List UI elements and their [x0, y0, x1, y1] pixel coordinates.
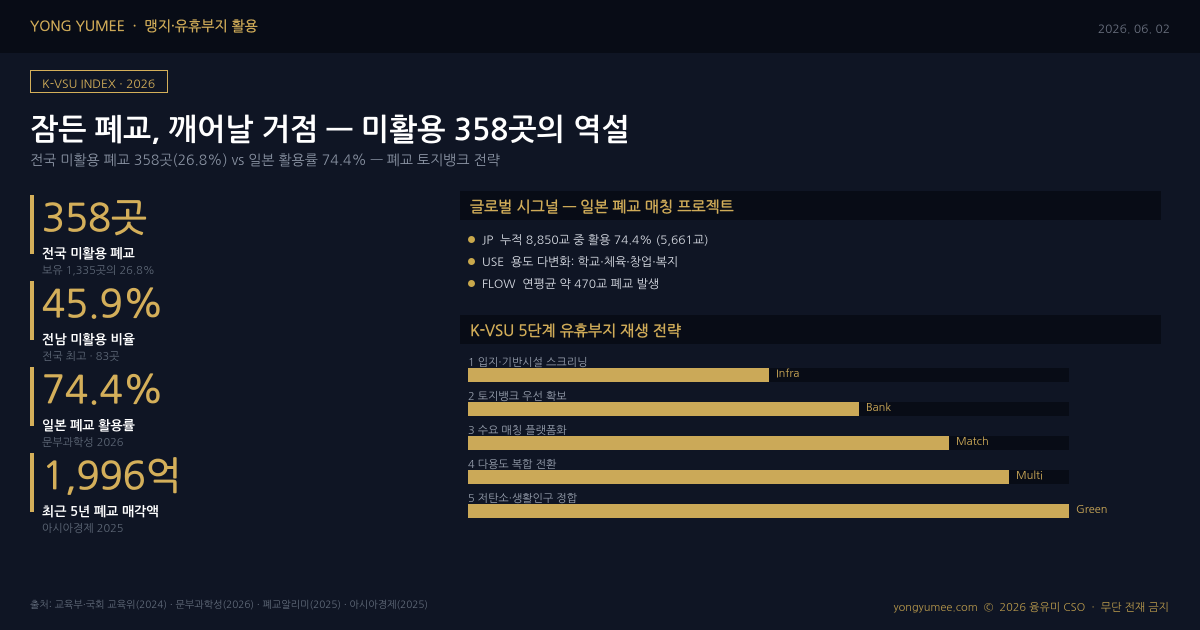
bar 4: 4 다용도 복합 전환: [468, 459, 556, 470]
stat 4: [30, 453, 181, 534]
stat 3: [30, 367, 164, 448]
stat 3: 일본 폐교 활용률: [42, 419, 135, 432]
bar 2: 2 토지뱅크 우선 확보: [468, 391, 567, 402]
stat 2: 45.9%: [42, 285, 164, 323]
copyright: yongyumee.com © 2026 융유미 CSO · 무단 전재 금지: [894, 602, 1169, 613]
bar 1: 1 입지·기반시설 스크리닝: [468, 357, 587, 368]
stat 2: 전남 미활용 비율: [42, 333, 135, 346]
stat 3: 74.4%: [42, 371, 164, 409]
sources: 출처: 교육부·국회 교육위(2024) · 문부과학성(2026) · 폐교알리미(2025) · 아시아경제(2025): [30, 600, 428, 610]
bullet: FLOW: FLOW 연평균 약 470교 폐교 발생: [482, 278, 659, 290]
stat 4: 최근 5년 폐교 매각액: [42, 505, 159, 518]
bar 5: Green: [1076, 504, 1107, 515]
header date: 2026. 06. 02: [1098, 23, 1170, 35]
bar 1: Infra: [776, 368, 799, 379]
stat 2: 전국 최고 · 83곳: [42, 351, 119, 362]
bar 5: [468, 492, 1107, 518]
bar 3: Match: [956, 436, 989, 447]
main title: 잠든 폐교, 깨어날 거점 — 미활용 358곳의 역설: [30, 116, 630, 145]
stat 4: 아시아경제 2025: [42, 523, 123, 534]
heading: strategy: K-VSU 5단계 유휴부지 재생 전략: [470, 324, 681, 339]
bar 1: [468, 356, 1069, 382]
stat 4: 1,996억: [42, 457, 181, 495]
heading: global signal: [460, 191, 1161, 220]
bar 4: Multi: [1016, 470, 1043, 481]
bullet: JP: JP 누적 8,850교 중 활용 74.4% (5,661교): [482, 234, 708, 246]
stat 1: 보유 1,335곳의 26.8%: [42, 265, 155, 276]
bullet: USE: USE 용도 다변화: 학교·체육·창업·복지: [482, 256, 678, 268]
bar 2: [468, 390, 1069, 416]
bar 4: [468, 458, 1069, 484]
bar 3: 3 수요 매칭 플랫폼화: [468, 425, 567, 436]
heading: global signal: 글로벌 시그널 — 일본 폐교 매칭 프로젝트: [470, 200, 734, 215]
bar 2: Bank: [866, 402, 891, 413]
stat 1: 358곳: [42, 199, 147, 237]
bar 3: [468, 424, 1069, 450]
header bar: [0, 0, 1200, 53]
stat 2: [30, 281, 164, 362]
index badge: K-VSU INDEX · 2026: [42, 78, 155, 90]
bar 5: 5 저탄소·생활인구 정합: [468, 493, 577, 504]
stat 3: 문부과학성 2026: [42, 437, 123, 448]
heading: strategy: [460, 315, 1161, 344]
header title: YONG YUMEE · 맹지·유휴부지 활용: [30, 20, 258, 34]
index badge: [30, 70, 168, 93]
subtitle: 전국 미활용 폐교 358곳(26.8%) vs 일본 활용률 74.4% — 폐교 토지뱅크 전략: [30, 154, 500, 168]
stat 1: 전국 미활용 폐교: [42, 247, 135, 260]
stat 1: [30, 195, 155, 276]
